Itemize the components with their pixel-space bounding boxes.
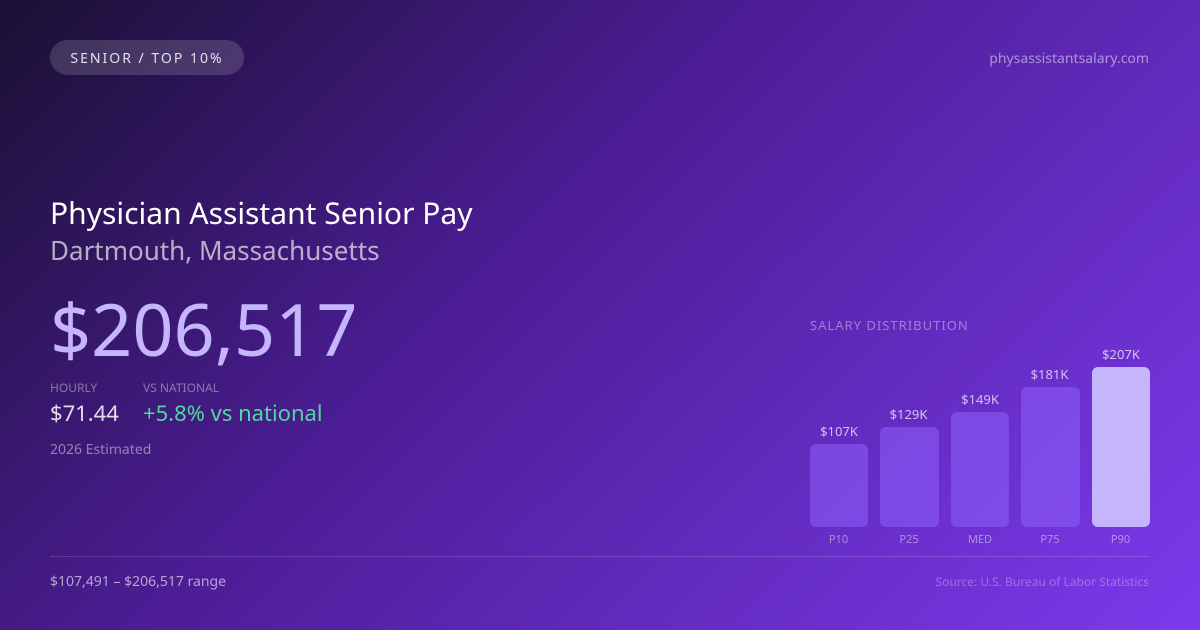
hourly value: $71.44 <box>50 398 119 428</box>
bar: P90 <box>1092 345 1150 547</box>
headline salary: $206,517 <box>50 280 358 378</box>
bar chart: salary distribution <box>810 345 1150 547</box>
hourly label: HOURLY <box>50 379 97 396</box>
P10 value: $107K <box>820 422 858 440</box>
source note: Source: U.S. Bureau of Labor Statistics <box>936 573 1149 590</box>
site domain: physassistantsalary.com <box>989 49 1149 68</box>
title: Physician Assistant Senior Pay <box>50 192 473 233</box>
P25 value: $129K <box>890 405 927 423</box>
P90 value: $207K <box>1102 345 1140 363</box>
P75 bar <box>1021 387 1080 527</box>
badge: senior / top 10% <box>50 40 244 75</box>
median label: MED <box>968 532 992 547</box>
badge: senior / top 10%: SENIOR / TOP 10% <box>70 49 224 68</box>
bar: P75 <box>1021 365 1080 547</box>
P10 label: P10 <box>829 532 848 547</box>
bar: P25 <box>880 405 939 547</box>
P90 label: P90 <box>1111 532 1130 547</box>
P75 value: $181K <box>1031 365 1068 383</box>
P25 label: P25 <box>899 532 919 547</box>
P90 bar <box>1092 367 1150 527</box>
hourly stat <box>50 379 119 428</box>
versus national stat <box>143 379 323 428</box>
versus national value: +5.8% vs national <box>143 398 323 428</box>
salary range: $107,491 – $206,517 range <box>50 572 226 591</box>
P75 label: P75 <box>1040 532 1060 547</box>
chart heading: SALARY DISTRIBUTION <box>810 316 969 334</box>
location subtitle: Dartmouth, Massachusetts <box>50 232 380 268</box>
versus national label: VS NATIONAL <box>143 379 219 396</box>
median bar <box>951 412 1009 527</box>
bar: P10 <box>810 422 868 547</box>
bar: median <box>951 390 1009 547</box>
P10 bar <box>810 444 868 527</box>
year note: 2026 Estimated <box>50 440 151 459</box>
median value: $149K <box>961 390 999 408</box>
P25 bar <box>880 427 939 527</box>
